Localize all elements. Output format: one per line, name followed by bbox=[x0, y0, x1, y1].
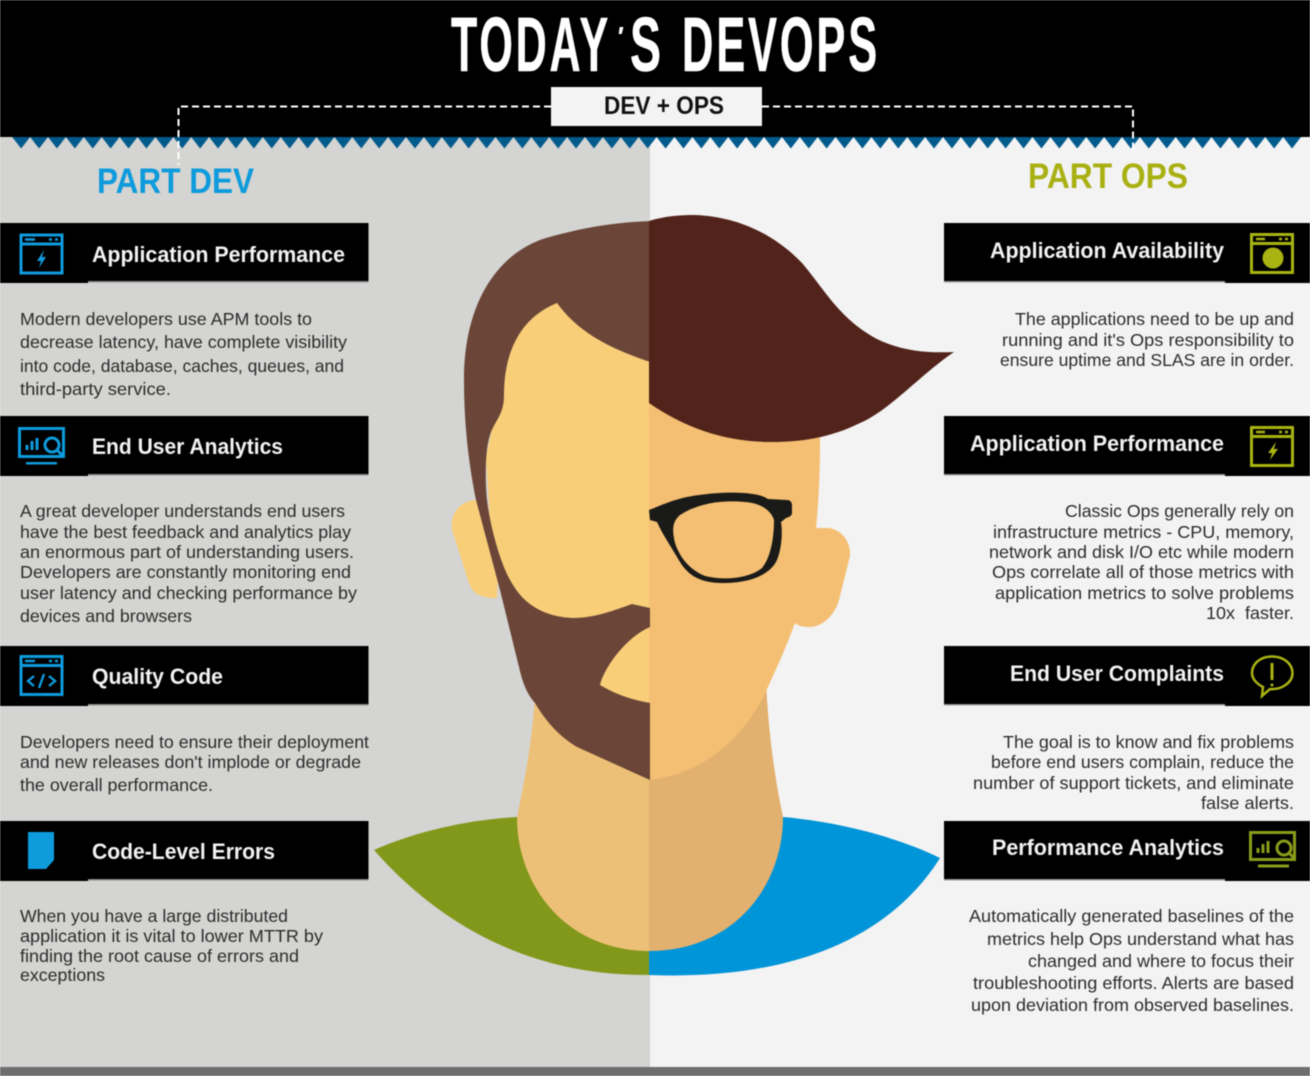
body text: and new releases don't implode or degrade bbox=[20, 752, 361, 772]
body text bbox=[20, 309, 347, 399]
right ear bbox=[795, 528, 850, 627]
title bar bbox=[0, 223, 368, 283]
title: TODAY bbox=[451, 2, 611, 88]
title: ' bbox=[616, 21, 624, 52]
title bar bbox=[944, 416, 1310, 476]
section: application performance (ops) bbox=[944, 416, 1310, 623]
icon: alert speech bubble bbox=[1252, 656, 1292, 696]
section: application availability bbox=[944, 223, 1310, 370]
body text: into code, database, caches, queues, and bbox=[20, 356, 344, 376]
dashed connector: dev bbox=[178, 106, 551, 165]
icon: window with bolt bbox=[1252, 428, 1292, 466]
title bar: End User Analytics bbox=[92, 434, 283, 459]
green shirt bbox=[374, 817, 650, 975]
title bbox=[451, 2, 880, 88]
left neck bbox=[517, 695, 650, 951]
body text: metrics help Ops understand what has bbox=[987, 929, 1294, 949]
section: application performance (dev) bbox=[0, 223, 368, 399]
body text: application metrics to solve problems bbox=[995, 583, 1294, 603]
body text: number of support tickets, and eliminate bbox=[973, 773, 1294, 793]
body text bbox=[1000, 309, 1294, 370]
icon: monitor with magnifier bbox=[20, 428, 64, 464]
subtitle box bbox=[551, 87, 762, 126]
title bar bbox=[944, 821, 1310, 881]
right face bbox=[649, 380, 820, 780]
left ear bbox=[452, 500, 500, 598]
icon: window with circle bbox=[1252, 234, 1292, 272]
title bar: Code-Level Errors bbox=[92, 839, 275, 864]
left panel background bbox=[0, 137, 650, 1067]
zigzag header edge bbox=[12, 137, 1301, 149]
body text: upon deviation from observed baselines. bbox=[971, 995, 1294, 1015]
right hair bbox=[649, 215, 954, 442]
body text: troubleshooting efforts. Alerts are based bbox=[973, 973, 1294, 993]
body text: A great developer understands end users bbox=[20, 501, 345, 521]
body text: The goal is to know and fix problems bbox=[1003, 732, 1294, 752]
body text: network and disk I/O etc while modern bbox=[989, 542, 1294, 562]
section: end user complaints bbox=[944, 646, 1310, 813]
section: code-level errors bbox=[0, 821, 368, 985]
body text: Developers are constantly monitoring end bbox=[20, 562, 351, 582]
subtitle box: DEV + OPS bbox=[604, 92, 724, 120]
title bar: End User Complaints bbox=[1010, 661, 1224, 686]
section: end user analytics bbox=[0, 416, 368, 626]
body text: finding the root cause of errors and bbox=[20, 946, 299, 966]
heading: part ops: PART OPS bbox=[1028, 157, 1188, 196]
body text: The applications need to be up and bbox=[1015, 309, 1294, 329]
left face bbox=[486, 300, 650, 710]
body text: application it is vital to lower MTTR by bbox=[20, 926, 323, 946]
title bar bbox=[0, 821, 368, 881]
title bar bbox=[0, 646, 368, 706]
body text: Modern developers use APM tools to bbox=[20, 309, 312, 329]
body text: devices and browsers bbox=[20, 606, 192, 626]
title bar bbox=[0, 416, 368, 476]
header band bbox=[0, 0, 1310, 137]
body text bbox=[20, 732, 369, 795]
section: performance analytics bbox=[944, 821, 1310, 1015]
body text bbox=[969, 906, 1294, 1015]
title bar: Quality Code bbox=[92, 664, 223, 689]
body text bbox=[973, 732, 1294, 813]
body text: false alerts. bbox=[1201, 793, 1294, 813]
illustration: split face bbox=[374, 215, 954, 975]
right neck bbox=[649, 680, 783, 951]
icon: window with bolt bbox=[21, 235, 62, 273]
body text: before end users complain, reduce the bbox=[991, 752, 1294, 772]
body text bbox=[20, 906, 323, 985]
body text: 10x faster. bbox=[1206, 603, 1294, 623]
icon: monitor with magnifier bbox=[1250, 832, 1295, 868]
body text: infrastructure metrics - CPU, memory, bbox=[993, 522, 1294, 542]
body text: When you have a large distributed bbox=[20, 906, 288, 926]
body text bbox=[989, 501, 1294, 623]
heading: part dev: PART DEV bbox=[97, 162, 255, 201]
body text: Classic Ops generally rely on bbox=[1065, 501, 1294, 521]
body text: third-party service. bbox=[20, 379, 171, 399]
body text: ensure uptime and SLAS are in order. bbox=[1000, 350, 1294, 370]
body text bbox=[20, 501, 357, 626]
title bar bbox=[944, 223, 1310, 283]
body text: the overall performance. bbox=[20, 775, 213, 795]
title bar: Performance Analytics bbox=[992, 835, 1224, 860]
blue shirt bbox=[649, 817, 940, 975]
icon: document bbox=[28, 832, 54, 869]
right panel background bbox=[650, 137, 1310, 1067]
body text: changed and where to focus their bbox=[1028, 951, 1294, 971]
title bar: Application Performance bbox=[92, 242, 345, 267]
title bar bbox=[944, 646, 1310, 706]
body text: user latency and checking performance by bbox=[20, 583, 357, 603]
body text: an enormous part of understanding users. bbox=[20, 542, 354, 562]
title bar: Application Availability bbox=[990, 238, 1224, 263]
body text: exceptions bbox=[20, 965, 105, 985]
body text: running and it's Ops responsibility to bbox=[1002, 330, 1294, 350]
glasses bbox=[649, 493, 792, 583]
body text: Ops correlate all of those metrics with bbox=[992, 562, 1294, 582]
title: DEVOPS bbox=[682, 2, 880, 88]
body text: decrease latency, have complete visibility bbox=[20, 332, 347, 352]
title: S bbox=[630, 2, 661, 88]
body text: Automatically generated baselines of the bbox=[969, 906, 1294, 926]
title bar: Application Performance bbox=[970, 431, 1224, 456]
bottom bar bbox=[0, 1067, 1310, 1076]
dashed connector: ops bbox=[762, 106, 1133, 155]
body text: have the best feedback and analytics play bbox=[20, 522, 351, 542]
section: quality code bbox=[0, 646, 369, 795]
left hair and beard bbox=[464, 221, 650, 780]
icon: code window bbox=[21, 656, 62, 694]
body text: Developers need to ensure their deployment bbox=[20, 732, 369, 752]
